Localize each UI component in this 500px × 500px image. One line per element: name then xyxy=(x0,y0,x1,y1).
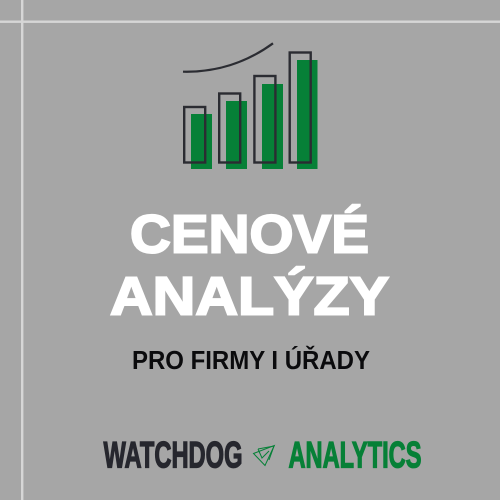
growth curve xyxy=(183,43,273,72)
icon: triangle logo xyxy=(254,446,274,466)
title xyxy=(110,204,389,326)
title: ANALÝZY xyxy=(110,266,389,326)
logo: Watchdog Analytics xyxy=(104,434,422,476)
logo word: Watchdog: WATCHDOG xyxy=(104,434,242,476)
outlined bars xyxy=(184,52,311,162)
icon: bar chart with growth curve xyxy=(183,43,318,169)
title: CENOVÉ xyxy=(130,204,369,264)
subtitle: PRO FIRMY I ÚŘADY xyxy=(132,345,370,375)
logo word: Analytics: ANALYTICS xyxy=(288,434,422,476)
green bars xyxy=(191,60,318,169)
